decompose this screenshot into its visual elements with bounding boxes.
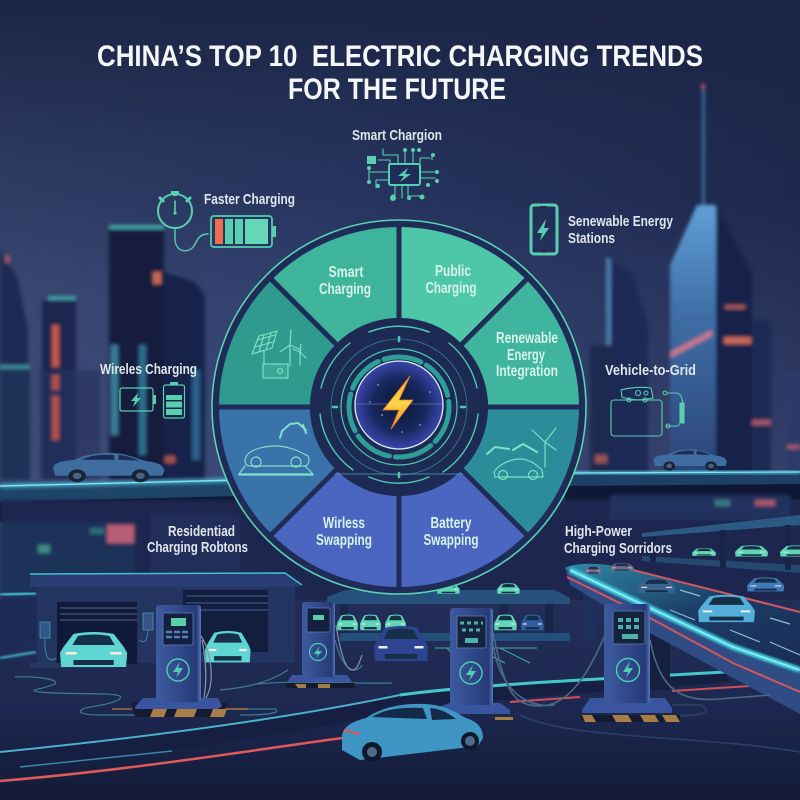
- label: renewable energy integration: Energy: [507, 347, 545, 364]
- icon: lightning bolt: [383, 376, 413, 429]
- label: residentiad charging robtons: Charging Robtons: [147, 539, 248, 556]
- car on left elevated road: [53, 453, 164, 482]
- icon: solar panel and wind turbines: [252, 330, 306, 378]
- label: senewable energy stations: [568, 213, 674, 247]
- label: high-power charging sorridors: High-Power: [565, 523, 632, 540]
- title: FOR THE FUTURE: [288, 73, 506, 106]
- label: senewable energy stations: Stations: [568, 230, 615, 247]
- label: smart chargion: Smart Chargion: [352, 127, 442, 144]
- ground: [0, 593, 800, 800]
- label: battery swapping: Swapping: [424, 532, 478, 549]
- skyline right: [590, 84, 800, 477]
- highway ramp: [565, 563, 800, 714]
- label: smart charging: Smart: [328, 264, 364, 281]
- label: smart charging: Charging: [319, 281, 371, 298]
- charger 2: [285, 602, 362, 688]
- label: public charging: Charging: [426, 280, 476, 297]
- title: CHINA’S TOP 10 ELECTRIC CHARGING TRENDS: [97, 40, 703, 73]
- label: battery swapping: Battery: [430, 515, 472, 532]
- label: public charging: [426, 263, 476, 297]
- label: senewable energy stations: Senewable Energy: [568, 213, 674, 230]
- icon: vehicle to grid: [611, 387, 684, 436]
- segment: renewable energy integration: [462, 280, 579, 407]
- skyline left: [0, 225, 205, 480]
- label: wirless swapping: Swapping: [316, 532, 372, 549]
- segment: wireless swapping: [272, 470, 399, 587]
- garage: [30, 573, 302, 668]
- label: renewable energy integration: Renewable: [496, 330, 558, 347]
- hub rings: [320, 326, 478, 483]
- hub globe: [355, 361, 443, 449]
- segment: smart charging: [272, 227, 399, 344]
- label: wirless swapping: Wirless: [323, 515, 365, 532]
- icon: circuit chip: [367, 148, 439, 201]
- lower city band: [0, 495, 800, 610]
- label: residentiad charging robtons: [147, 523, 248, 556]
- label: wireles charging: Wireles Charging: [100, 361, 197, 378]
- segment: industry and turbine: [462, 407, 579, 534]
- label: high-power charging sorridors: [564, 523, 672, 557]
- ground cables: [15, 620, 800, 752]
- charger 3: [435, 608, 513, 720]
- label: public charging: Public: [435, 263, 471, 280]
- label: high-power charging sorridors: Charging Sorridors: [564, 540, 672, 557]
- label: vehicle-to-grid: Vehicle-to-Grid: [605, 362, 696, 379]
- panel: charging wheel: [212, 220, 586, 594]
- elevated road right: [565, 472, 800, 502]
- label: battery swapping: [424, 515, 478, 549]
- label: residentiad charging robtons: Residentiad: [168, 523, 235, 540]
- car on right elevated road: [653, 449, 727, 471]
- charger 4: [580, 604, 680, 722]
- label: wirless swapping: [316, 515, 372, 549]
- icon: robot arms, turbine and car: [487, 428, 556, 480]
- upper decks right: [642, 515, 800, 591]
- label: renewable energy integration: Integration: [496, 363, 558, 380]
- label: renewable energy integration: [496, 330, 558, 380]
- icon: wireless batteries: [120, 382, 184, 418]
- garage cars: [60, 631, 251, 667]
- icon: stopwatch and battery: [158, 191, 276, 251]
- elevated road left: [0, 480, 240, 522]
- front car: [342, 704, 483, 762]
- charger 1: [112, 605, 248, 717]
- segment: robotic charging: [219, 407, 336, 534]
- segment: battery swapping: [399, 470, 526, 587]
- label: faster charging: Faster Charging: [204, 191, 295, 208]
- icon: robot arm and car on pad: [239, 423, 313, 475]
- label: smart charging: [319, 264, 371, 298]
- segment: solar and wind: [219, 280, 336, 407]
- parking deck: [327, 583, 570, 663]
- title: [97, 40, 703, 106]
- icon: phone with bolt: [531, 205, 557, 254]
- segment: public charging: [399, 227, 526, 344]
